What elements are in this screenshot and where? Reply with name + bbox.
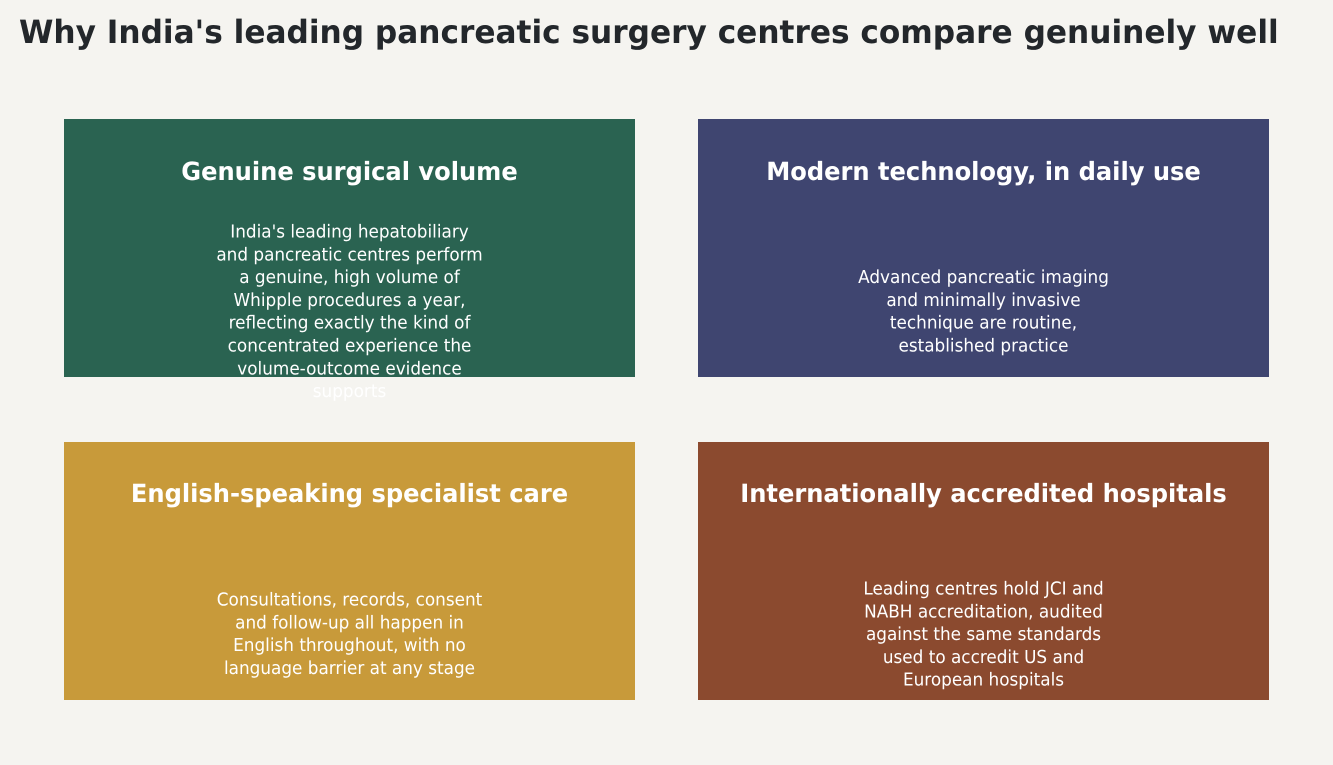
text block: surgical volume description: India's leading hepatobiliary [230,221,469,242]
heading: modern technology: Modern technology, in daily use [766,157,1201,186]
text block: english-speaking description: language barrier at any stage [224,657,475,678]
text block: modern technology description: and minimally invasive [886,289,1081,310]
text block: surgical volume description: a genuine, high volume of [239,266,461,287]
text block: surgical volume description: Whipple procedures a year, [234,289,466,310]
text block: surgical volume description: reflecting exactly the kind of [229,312,471,333]
title: Why India's leading pancreatic surgery centres compare genuinely well [19,14,1279,51]
text block: accreditation description [863,578,1104,690]
text block: surgical volume description: volume-outcome evidence [237,357,462,379]
panel: english-speaking care [64,442,635,700]
text block: english-speaking description: and follow-up all happen in [235,611,464,633]
text block: accreditation description: Leading centres hold JCI and [863,578,1104,599]
text block: modern technology description [858,266,1109,356]
text block: accreditation description: used to accredit US and [883,646,1084,667]
text block: surgical volume description: supports [313,380,386,401]
text block: modern technology description: technique are routine, [890,312,1077,333]
heading: accredited hospitals: Internationally accredited hospitals [740,479,1227,508]
text block: accreditation description: European hospitals [903,669,1064,690]
heading: genuine surgical volume: Genuine surgical volume [181,157,518,186]
text block: accreditation description: NABH accreditation, audited [864,600,1103,622]
text block: english-speaking description: English throughout, with no [233,634,466,655]
text block: modern technology description: established practice [898,335,1069,356]
text block: surgical volume description: and pancreatic centres perform [216,243,483,265]
text block: accreditation description: against the same standards [866,623,1101,644]
text block: modern technology description: Advanced pancreatic imaging [858,266,1109,287]
panel: accredited hospitals [698,442,1269,700]
panel: modern technology [698,119,1269,377]
panel: genuine surgical volume [64,119,635,401]
text block: english-speaking description [217,589,483,678]
text block: surgical volume description [216,221,483,401]
heading: english-speaking care: English-speaking specialist care [131,479,568,508]
text block: surgical volume description: concentrated experience the [228,335,471,356]
text block: english-speaking description: Consultations, records, consent [217,589,483,610]
